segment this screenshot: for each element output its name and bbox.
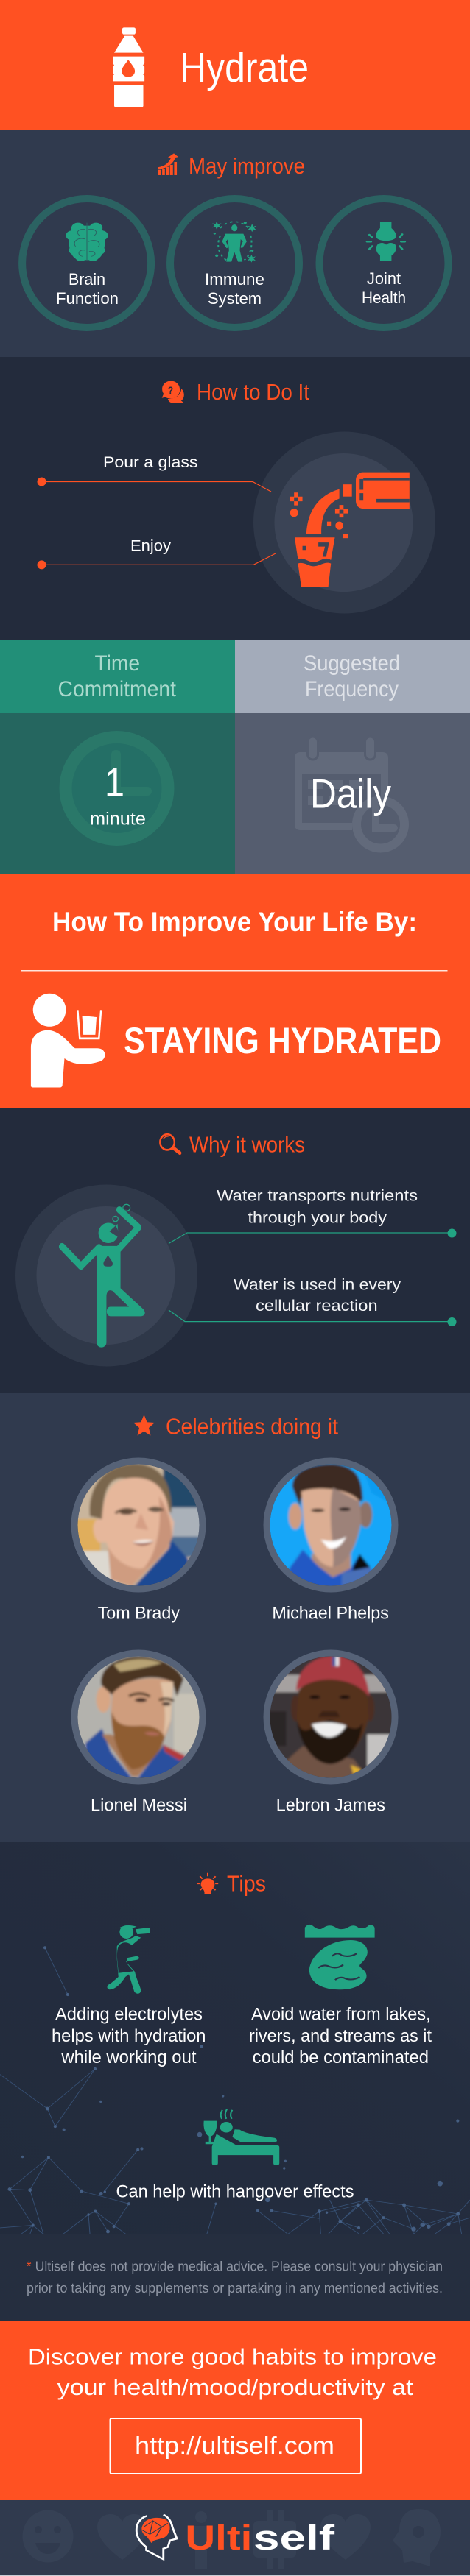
icon: brain head logo: [136, 2515, 177, 2559]
fact: transports nutrients: through your body: [248, 1209, 387, 1226]
portrait: lionel messi: [72, 1652, 206, 1783]
name: lebron james: Lebron James: [276, 1796, 385, 1816]
text: avoid lake water: could be contaminated: [253, 2048, 429, 2067]
text: disclaimer: prior to taking any supplements or partaking in any mentioned activities.: [27, 2281, 443, 2296]
label: brain function: Brain: [69, 270, 105, 289]
heading: time commitment: [57, 651, 177, 701]
heading: how to improve your life by: How To Improve Your Life By:: [52, 907, 417, 937]
panel: celebrities doing it: [0, 1393, 470, 1842]
label: immune system: Immune: [205, 270, 264, 289]
text: disclaimer: *: [27, 2260, 31, 2274]
icon: bottle pouring into glass: [290, 473, 410, 587]
text: disclaimer: Ultiself does not provide medical advice. Please consult your physician: [35, 2260, 443, 2274]
label: joint health: Joint: [367, 269, 401, 288]
label: immune system: System: [208, 289, 262, 308]
icon: clock background: [59, 731, 174, 846]
fact: cellular reaction: Water is used in every: [234, 1276, 401, 1294]
badge: joint health: [320, 199, 448, 328]
text: avoid lake water: rivers, and streams as it: [249, 2026, 432, 2046]
panel: disclaimer: [0, 2234, 470, 2321]
text: electrolytes: Adding electrolytes: [55, 2005, 203, 2024]
panel: tips: [0, 1842, 470, 2234]
logo: ultiself: [136, 2515, 334, 2559]
button: ultiself url: [111, 2418, 361, 2474]
step: enjoy: [37, 538, 276, 569]
label: immune system: [205, 270, 264, 308]
label: joint health: Health: [362, 289, 406, 307]
badge: brain function: [22, 199, 151, 328]
step: pour a glass: [37, 454, 271, 492]
illustration circle: [253, 431, 435, 614]
title: Hydrate: [180, 44, 309, 91]
icon: calendar with clock: [295, 737, 404, 848]
step: enjoy: Enjoy: [130, 538, 172, 555]
icon: person in bed with wine: [203, 2109, 279, 2165]
tip: hangover: [116, 2109, 354, 2202]
icon: runner drinking: [108, 1925, 150, 1994]
ghost icons: [22, 2509, 441, 2569]
illustration circle: [15, 1185, 197, 1366]
text: discover more: [28, 2344, 437, 2400]
step: pour a glass: Pour a glass: [103, 454, 197, 471]
portrait: lebron james: [264, 1652, 397, 1783]
button: ultiself url: http://ultiself.com: [135, 2432, 334, 2459]
icon: question chat bubbles: ?: [168, 384, 173, 396]
value: 1 minute: [90, 759, 146, 829]
heading: celebrities doing it: Celebrities doing it: [166, 1413, 338, 1440]
panel: header: [0, 0, 470, 130]
heading: suggested frequency: [304, 651, 400, 701]
text: avoid lake water: Avoid water from lakes,: [251, 2005, 431, 2024]
text: electrolytes: [52, 2005, 206, 2067]
name: lionel messi: Lionel Messi: [91, 1796, 187, 1816]
heading: time commitment: Commitment: [57, 677, 177, 701]
heading: may improve: May improve: [189, 153, 305, 179]
panel: footer: [0, 2500, 470, 2576]
icon: lake: [305, 1925, 375, 1989]
icon: water bottle: [113, 27, 144, 107]
value: 1 minute: minute: [90, 810, 146, 829]
text: disclaimer: [27, 2260, 443, 2296]
portrait: tom brady: [72, 1459, 206, 1590]
label: joint health: [362, 269, 406, 307]
value: 1 minute: 1: [105, 759, 124, 805]
tip: avoid lake water: [249, 1925, 432, 2067]
icon: joint: [367, 222, 405, 261]
heading: tips: Tips: [227, 1871, 266, 1897]
heading: how to do it: How to Do It: [197, 379, 309, 405]
text: discover more: Discover more good habits to improve: [28, 2344, 437, 2370]
badge: immune system: [170, 199, 299, 328]
text: discover more: your health/mood/productivity at: [57, 2374, 413, 2400]
label: brain function: Function: [56, 289, 119, 308]
panel: why it works: [0, 1108, 470, 1393]
panel: suggested frequency: [235, 640, 470, 874]
fact: cellular reaction: cellular reaction: [256, 1297, 378, 1314]
tip: electrolytes: [52, 1925, 206, 2067]
fact: transports nutrients: Water transports nutrients: [217, 1187, 418, 1205]
icon: rising chart: [158, 153, 178, 175]
heading: time commitment: Time: [94, 651, 140, 676]
label: brain function: [56, 270, 119, 308]
heading: suggested frequency: Frequency: [305, 677, 399, 701]
fact: transports nutrients: [169, 1187, 457, 1244]
fact: cellular reaction: [169, 1276, 457, 1326]
wordmark: Ulti: [185, 2518, 252, 2557]
panel: how to do it: [0, 357, 470, 640]
panel: call to action: [0, 2321, 470, 2500]
text: hangover: Can help with hangover effects: [116, 2182, 354, 2202]
text: electrolytes: helps with hydration: [52, 2026, 206, 2046]
portrait: michael phelps: [264, 1459, 397, 1590]
icon: question chat bubbles: [162, 381, 184, 403]
wordmark: self: [253, 2518, 334, 2557]
heading: suggested frequency: Suggested: [304, 651, 400, 676]
heading: why it works: Why it works: [189, 1132, 305, 1158]
text: avoid lake water: [249, 2005, 432, 2067]
panel: how to improve banner: [0, 874, 470, 1108]
text: electrolytes: while working out: [60, 2048, 197, 2067]
icon: star: [133, 1415, 155, 1435]
icon: magnifier: [160, 1134, 180, 1153]
panel: time commitment: [0, 640, 235, 874]
icon: person drinking on one leg: [62, 1204, 145, 1348]
name: tom brady: Tom Brady: [98, 1604, 180, 1624]
icon: person holding glass: [31, 994, 105, 1087]
value: daily: Daily: [310, 770, 391, 817]
icon: light bulb: [197, 1873, 218, 1894]
name: michael phelps: Michael Phelps: [272, 1604, 389, 1624]
icon: immune person: [212, 222, 256, 263]
panel: may improve: [0, 130, 470, 357]
icon: brain: [66, 223, 108, 261]
